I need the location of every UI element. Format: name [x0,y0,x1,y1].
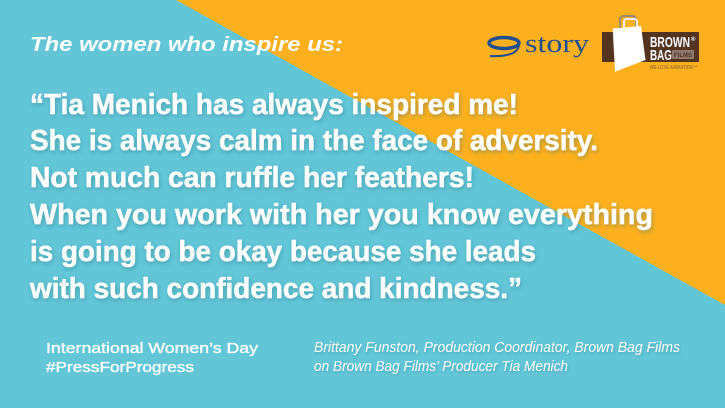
quote: Not much can ruffle her feathers! [30,162,474,194]
heading: The women who inspire us: [30,34,343,56]
logo: Brown Bag Films [602,16,699,72]
background: orange diagonal panel [176,0,725,305]
footer: campaign: #PressForProgress [46,359,194,376]
footer: campaign [46,340,259,376]
logo: Brown Bag Films: ® [691,36,696,43]
quote: with such confidence and kindness.” [29,273,522,305]
logo: 9story [489,29,589,58]
footer: attribution: Brittany Funston, Production Coordinator, Brown Bag Films [314,339,680,356]
footer: attribution [314,339,680,375]
footer: campaign: International Women’s Day [46,340,259,357]
logo: Brown Bag Films: BAG [650,47,672,64]
quote [29,89,653,305]
quote: is going to be okay because she leads [30,236,536,268]
logo: 9story: story [525,29,589,58]
quote: She is always calm in the face of adversity. [30,125,598,157]
logo: Brown Bag Films: BROWN [650,34,690,51]
quote: “Tia Menich has always inspired me! [30,89,518,121]
quote: When you work with her you know everything [30,199,653,231]
logo: Brown Bag Films: WE LOVE ANIMATION™ [650,65,697,71]
logo: Brown Bag Films: FILMS [674,53,692,59]
footer: attribution: on Brown Bag Films’ Producer Tia Menich [314,358,568,375]
